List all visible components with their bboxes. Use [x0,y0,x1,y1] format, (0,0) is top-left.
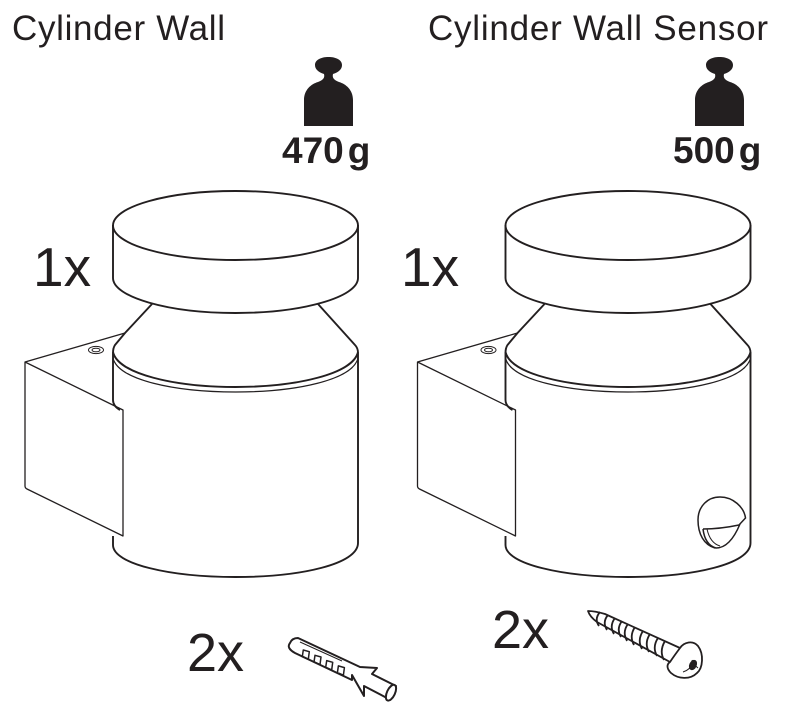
weight label: 470 g: 470g [282,130,370,171]
quantity: 1x left: 1x [33,236,91,298]
quantity: 2x left: 2x [187,623,244,683]
illustration: Cylinder Wall lamp [25,191,358,577]
icon: weight 500 g [695,57,744,126]
weight label: 500 g: 500g [673,130,761,171]
quantity: 2x right: 2x [492,600,549,660]
icon: wall plug [289,638,398,702]
quantity: 1x right: 1x [401,236,459,298]
title: Cylinder Wall: Cylinder Wall [12,9,225,48]
icon: motion sensor [698,497,746,548]
illustration: Cylinder Wall Sensor lamp [418,191,750,577]
icon: weight 470 g [304,57,353,126]
title: Cylinder Wall Sensor: Cylinder Wall Sensor [428,9,768,48]
icon: screw [588,611,702,678]
